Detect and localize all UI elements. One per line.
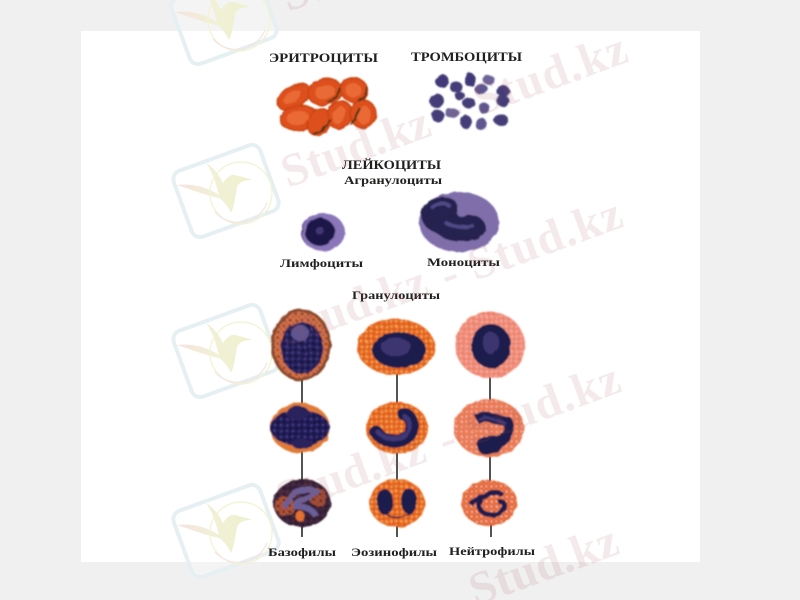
erythrocyte cluster (273, 75, 376, 139)
eosinophil young (357, 319, 435, 375)
watermark text: - Stud.kz (433, 187, 629, 301)
basophil young (271, 309, 331, 381)
watermark text (269, 0, 634, 600)
basophil segmented (273, 479, 331, 527)
column: basophils (270, 309, 331, 527)
heading: thrombocytes: ТРОМБОЦИТЫ (411, 50, 523, 64)
neutrophil young (455, 312, 525, 378)
label: lymphocytes: Лимфоциты (280, 256, 364, 270)
eosinophil band (366, 402, 428, 454)
watermark text: Stud.kz (271, 255, 434, 357)
watermark text: Stud.kz (274, 96, 437, 198)
eosinophil segmented (369, 479, 425, 527)
watermark logos (155, 0, 292, 595)
basophil band (270, 403, 330, 453)
label: basophils: Базофилы (268, 545, 337, 559)
column: eosinophils (357, 319, 435, 527)
watermark text: - Stud.kz (438, 22, 634, 136)
platelet cluster (430, 73, 510, 130)
heading: agranulocytes: Агранулоциты (344, 173, 443, 187)
watermark text: Stud.kz (269, 422, 432, 524)
monocyte cell (419, 192, 499, 252)
watermark text: - Stud.kz (431, 352, 627, 466)
label: neutrophils: Нейтрофилы (449, 544, 536, 558)
white image panel (81, 31, 700, 562)
label: eosinophils: Эозинофилы (351, 545, 438, 559)
heading: leukocytes: ЛЕЙКОЦИТЫ (342, 157, 441, 172)
neutrophil band (454, 399, 524, 457)
heading: erythrocytes: ЭРИТРОЦИТЫ (269, 51, 379, 65)
column: neutrophils (454, 312, 525, 526)
label: monocytes: Моноциты (427, 255, 501, 269)
neutrophil segmented (461, 480, 517, 526)
heading: granulocytes: Гранулоциты (352, 290, 440, 302)
lymphocyte cell (301, 213, 345, 251)
connector lines (302, 372, 491, 537)
